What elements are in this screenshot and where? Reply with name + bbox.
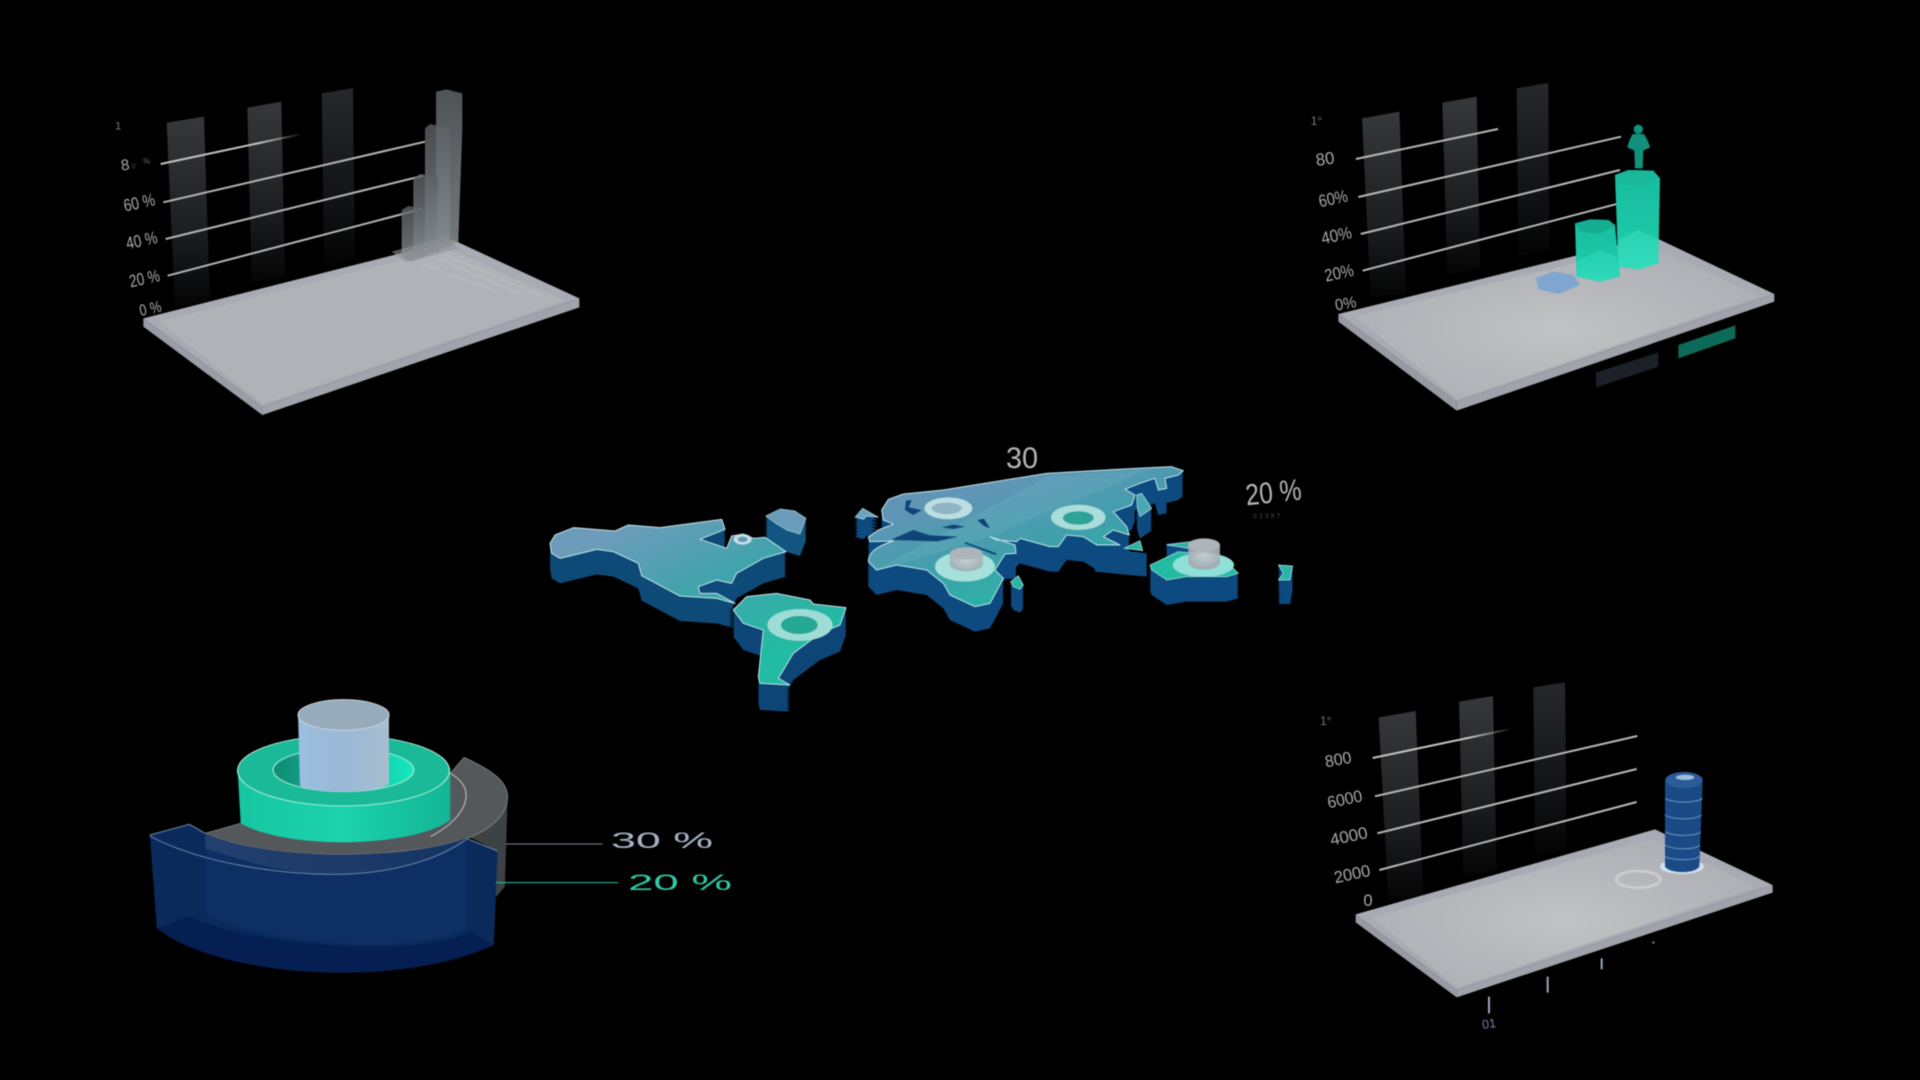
ring marker: hudson xyxy=(734,534,752,545)
ring marker and cylinder: africa xyxy=(935,547,995,582)
panel: layered donut chart xyxy=(150,700,732,973)
ring marker: asia xyxy=(1051,505,1106,530)
ring marker on platform xyxy=(1616,871,1660,888)
grid lines xyxy=(1356,129,1621,271)
small caption: 0 2 3 9 7 xyxy=(1253,514,1281,520)
legend swatch: green xyxy=(1678,325,1735,358)
axis labels xyxy=(1311,114,1358,315)
axis labels: 20 % xyxy=(127,265,161,291)
axis labels xyxy=(1320,714,1373,910)
blue hexagon base xyxy=(1536,272,1580,294)
axis labels: 40% xyxy=(1319,222,1353,248)
axis labels: 40 % xyxy=(124,227,159,253)
axis labels: % xyxy=(143,157,150,166)
blue ring top edges xyxy=(150,824,498,874)
panel: top-right bar chart xyxy=(1311,83,1774,411)
axis labels: 800 xyxy=(1323,748,1353,771)
back columns xyxy=(1379,682,1567,902)
axis labels: 80 xyxy=(1314,148,1336,170)
icon: person figure xyxy=(1627,125,1650,168)
panel: world map xyxy=(550,442,1303,712)
north america top xyxy=(550,519,786,603)
platform xyxy=(1356,829,1773,997)
green ring hole xyxy=(273,748,414,792)
stacked blue cylinder xyxy=(1660,772,1704,874)
tall hexagonal bar xyxy=(1615,170,1660,269)
ring marker: south america xyxy=(767,609,833,641)
axis labels: 20% xyxy=(1323,260,1356,286)
ring marker: europe xyxy=(924,497,972,519)
light band xyxy=(873,469,1150,572)
grid lines xyxy=(161,134,425,276)
grid lines xyxy=(1373,729,1637,870)
main extrusion xyxy=(868,468,1183,632)
axis labels: 60% xyxy=(1317,186,1350,211)
back columns xyxy=(1362,83,1549,298)
short hexagonal bar xyxy=(1575,219,1620,282)
label: 20% green: 20 % xyxy=(628,870,732,895)
axis labels: 0% xyxy=(1334,294,1358,315)
axis labels: 4000 xyxy=(1328,823,1369,850)
eurasia, africa, oceania xyxy=(855,442,1303,632)
americas xyxy=(550,509,846,712)
blue ring body xyxy=(150,824,498,973)
greenland top xyxy=(766,509,806,534)
axis labels: 6000 xyxy=(1326,786,1364,812)
axis labels: 8 xyxy=(120,157,131,175)
leader line: 30% xyxy=(506,842,603,845)
blue ring bottom face xyxy=(157,916,494,973)
axis labels: 1 xyxy=(115,120,121,132)
blue ring top band xyxy=(205,834,466,874)
axis labels xyxy=(115,120,163,320)
leader line: 20% xyxy=(496,881,618,884)
label: 30: 30 xyxy=(1006,442,1038,475)
label: 20%: 20 % xyxy=(1244,474,1303,512)
north america extrusion xyxy=(550,521,786,628)
panel: top-left bar chart xyxy=(115,88,579,415)
seas xyxy=(892,500,997,555)
panel: bottom-right bar chart xyxy=(1320,682,1773,1032)
axis labels: 60 % xyxy=(122,189,157,216)
south america top xyxy=(733,593,846,685)
grey bars xyxy=(392,89,462,262)
label: 30%: 30 % xyxy=(611,828,713,853)
axis labels: 2000 xyxy=(1332,861,1372,887)
platform streaks xyxy=(420,255,543,297)
light blue cylinder xyxy=(298,700,389,792)
axis labels: 1° xyxy=(1311,114,1322,128)
axis labels: 0 % xyxy=(138,299,163,320)
eurasia and africa top xyxy=(868,467,1183,607)
green ring body xyxy=(238,768,450,842)
blue inner panel xyxy=(205,839,466,944)
islands extrusion xyxy=(855,495,1293,613)
south america extrusion xyxy=(733,595,846,712)
axis labels: 0 xyxy=(132,161,136,170)
legend swatch: dark xyxy=(1596,352,1658,387)
x-axis label: 01 xyxy=(1481,1016,1497,1032)
platform xyxy=(1338,237,1774,411)
leader line: fading xyxy=(494,931,571,934)
grey ring top xyxy=(205,757,508,854)
green ring top xyxy=(238,735,449,806)
grey ring inner arc xyxy=(431,773,466,837)
platform xyxy=(143,240,579,415)
grey ring side xyxy=(470,797,508,897)
x-axis ticks xyxy=(1489,942,1653,1013)
greenland extrusion xyxy=(766,511,806,556)
ring marker and cylinder: australia xyxy=(1173,538,1234,577)
small islands top xyxy=(855,493,1293,589)
axis labels: 0 xyxy=(1363,891,1373,910)
back columns xyxy=(167,88,355,307)
axis labels: 1° xyxy=(1320,714,1332,728)
